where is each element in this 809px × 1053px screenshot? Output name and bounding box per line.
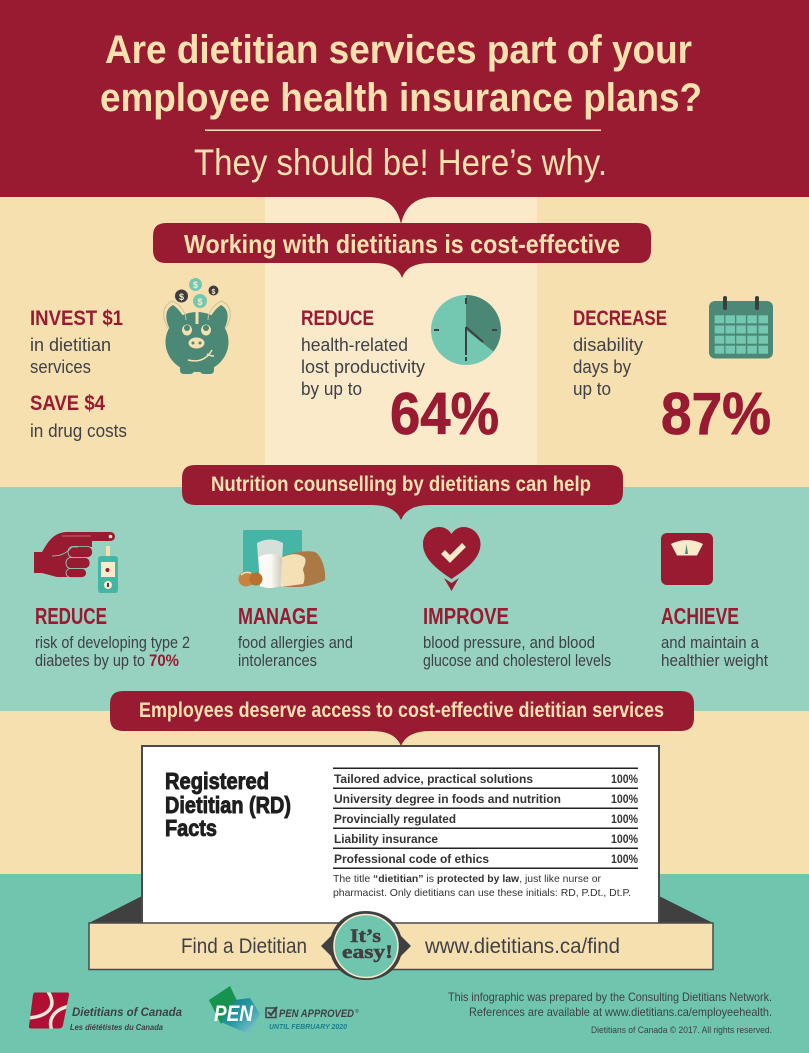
credits text: References are available at www.dietitians.ca/employeehealth.: [469, 1005, 772, 1019]
text: achieve: ACHIEVE: [661, 603, 739, 629]
logo: Dietitians of Canada: Dietitians of Canada: [72, 1005, 182, 1019]
text: invest $1: services: [30, 357, 91, 377]
logo: PEN approved: ®: [355, 1008, 359, 1015]
panel: improve blood pressure: [423, 527, 611, 670]
text: manage: food allergies and: [238, 634, 353, 652]
subtitle: They should be! Here’s why.: [194, 142, 607, 183]
footnote: The title “dietitian” is protected by law, just like nurse or: [333, 873, 601, 885]
text: save $4: in drug costs: [30, 421, 127, 441]
footnote: [333, 873, 631, 899]
section heading: nutrition counselling: [182, 465, 623, 520]
banner: find a dietitian: [89, 911, 713, 980]
facts table: University degree in foods and nutrition: [334, 794, 561, 806]
title: Are dietitian services part of your: [105, 28, 692, 72]
card heading: Dietitian (RD): [165, 792, 291, 818]
icon: heart with check mark: [423, 527, 480, 591]
text: decrease: days by: [573, 357, 631, 377]
text: invest $1: INVEST $1: [30, 307, 123, 330]
text: improve: blood pressure, and blood: [423, 634, 595, 652]
panel: invest and save: [30, 278, 230, 441]
badge: it's easy: easy!: [342, 942, 393, 963]
logo: Dietitians of Canada: Les diététistes du Canada: [70, 1022, 163, 1032]
text: manage: [238, 603, 353, 670]
text: decrease: up to: [573, 379, 611, 399]
text: achieve: [661, 603, 768, 670]
title: employee health insurance plans?: [100, 76, 702, 120]
text: achieve: healthier weight: [661, 652, 768, 670]
text: reduce diabetes: 70%: [149, 652, 179, 670]
badge: it's easy: [321, 911, 411, 980]
section heading: employees deserve access: Employees deserve access to cost-effective dietitian services: [139, 699, 664, 722]
credits text: [448, 990, 772, 1036]
text: manage: intolerances: [238, 652, 317, 670]
icon: calendar: [709, 296, 773, 358]
panel: manage allergies: [238, 530, 353, 670]
facts table: 100%: [611, 854, 638, 866]
credits text: Dietitians of Canada © 2017. All rights reserved.: [591, 1025, 772, 1036]
title: [100, 28, 702, 120]
section heading: nutrition counselling: Nutrition counselling by dietitians can help: [211, 473, 591, 496]
text: reduce: by up to: [301, 379, 362, 399]
text: reduce: health-related: [301, 335, 408, 355]
icon: clock: [431, 295, 501, 365]
text: decrease: DECREASE: [573, 307, 667, 330]
icon: piggy bank with coins: [164, 278, 230, 374]
card heading: Registered: [165, 768, 269, 794]
panel: RD facts card: [89, 746, 713, 926]
text: decrease: disability: [573, 335, 643, 355]
logo: PEN approved: PEN APPROVED: [279, 1008, 354, 1020]
text: reduce diabetes: risk of developing type 2: [35, 634, 190, 652]
stat: 87%: 87%: [661, 381, 771, 447]
footnote: pharmacist. Only dietitians can use these initials: RD, P.Dt., Dt.P.: [333, 887, 631, 899]
facts table: Provincially regulated: [334, 814, 456, 826]
facts table: Tailored advice, practical solutions: [334, 774, 533, 786]
facts table: Liability insurance: [334, 834, 438, 846]
icon: milk, bread and eggs: [238, 530, 325, 588]
text: save $4: [30, 392, 127, 441]
text: invest $1: [30, 307, 123, 377]
text: improve: glucose and cholesterol levels: [423, 652, 611, 670]
icon: piggy bank with coins: $: [212, 289, 216, 296]
panel: reduce diabetes risk: [34, 532, 190, 670]
badge: it's easy: It’s: [350, 926, 381, 947]
text: reduce diabetes: [35, 603, 190, 670]
icon: bathroom scale: [661, 533, 713, 585]
text: reduce: REDUCE: [301, 307, 374, 330]
text: reduce: [301, 307, 425, 399]
logo: PEN approved: UNTIL FEBRUARY 2020: [269, 1022, 348, 1031]
text: manage: MANAGE: [238, 603, 318, 629]
text: invest $1: in dietitian: [30, 335, 111, 355]
facts table: Professional code of ethics: [334, 854, 489, 866]
section heading: cost-effective: [153, 223, 651, 278]
icon: piggy bank with coins: $: [193, 280, 198, 290]
text: reduce diabetes: diabetes by up to: [35, 652, 145, 670]
header banner: [0, 0, 809, 224]
logo: Dietitians of Canada: [28, 992, 182, 1030]
icon: finger and glucose meter: [34, 532, 118, 593]
text: find a dietitian: Find a Dietitian: [181, 935, 307, 958]
panel: achieve healthy weight: [661, 533, 768, 670]
panel: reduce lost productivity: [301, 295, 501, 447]
facts table: 100%: [611, 774, 638, 786]
credits text: This infographic was prepared by the Consulting Dietitians Network.: [448, 990, 772, 1004]
facts table: 100%: [611, 794, 638, 806]
text: website: www.dietitians.ca/find: [424, 935, 620, 958]
card heading: Facts: [165, 815, 217, 841]
panel: decrease disability days: [573, 296, 773, 447]
text: improve: [423, 603, 611, 670]
card heading: [165, 768, 291, 841]
text: save $4: SAVE $4: [30, 392, 105, 415]
text: achieve: and maintain a: [661, 634, 760, 652]
text: improve: IMPROVE: [423, 603, 509, 629]
facts table: 100%: [611, 834, 638, 846]
section heading: cost-effective: Working with dietitians is cost-effective: [184, 229, 620, 259]
section heading: employees deserve access: [110, 691, 694, 746]
text: decrease: [573, 307, 667, 399]
logo: PEN approved: [209, 986, 359, 1034]
stat: 64%: 64%: [390, 381, 499, 447]
icon: piggy bank with coins: $: [197, 297, 203, 307]
facts table: [333, 768, 638, 869]
text: reduce: lost productivity: [301, 357, 425, 377]
icon: piggy bank with coins: $: [179, 292, 184, 302]
facts table: 100%: [611, 814, 638, 826]
text: reduce diabetes: REDUCE: [35, 603, 107, 629]
logo: PEN approved: PEN: [214, 1001, 254, 1026]
